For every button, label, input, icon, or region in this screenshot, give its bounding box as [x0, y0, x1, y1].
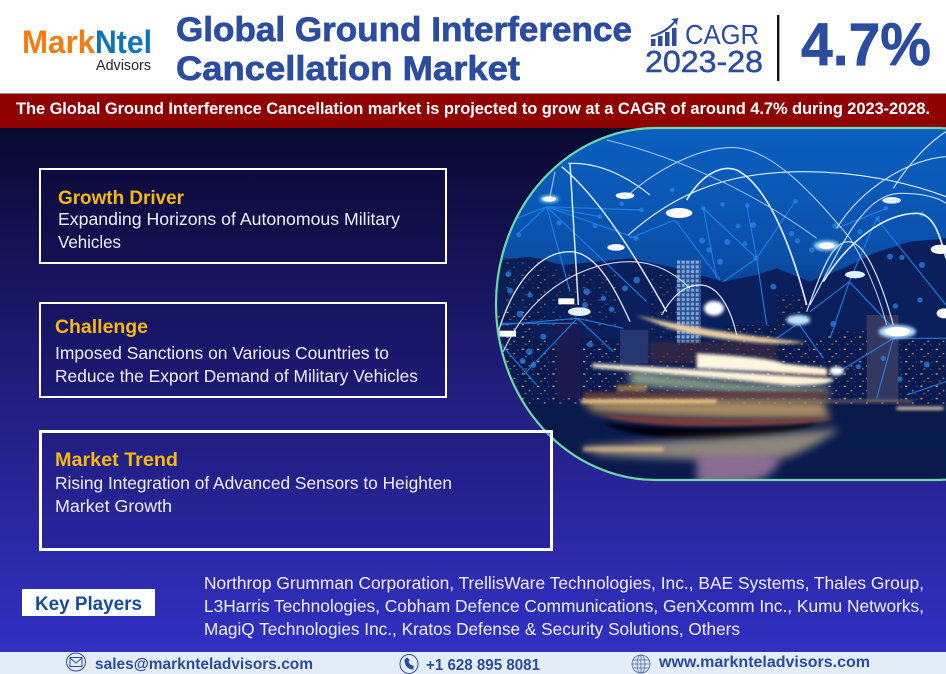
footer website: www.marknteladvisors.com [658, 654, 870, 671]
title [176, 11, 632, 88]
title: Global Ground Interference [176, 11, 632, 49]
icon: growth chart [651, 18, 678, 46]
panel: growth driver: Expanding Horizons of Autonomous Military [58, 209, 400, 229]
panel: challenge: Challenge [55, 317, 148, 338]
ship light trails [582, 315, 833, 439]
key players list: Northrop Grumman Corporation, TrellisWare Technologies, Inc., BAE Systems, Thales Group, [204, 573, 924, 593]
CAGR period label: 2023-28 [645, 44, 763, 79]
summary banner: The Global Ground Interference Cancellation market is projected to grow at a CAGR of around 4.7% during 2023-2028. [16, 100, 930, 118]
logo: MarkNtel Advisors: Mark [22, 24, 95, 60]
footer bar [0, 652, 946, 674]
icon: phone [400, 654, 418, 674]
blue bokeh dots [505, 188, 930, 382]
panel: growth driver: Growth Driver [58, 188, 185, 209]
glowing nodes [499, 192, 946, 375]
panel: market trend: Market Trend [55, 450, 178, 471]
key players list: L3Harris Technologies, Cobham Defence Communications, GenXcomm Inc., Kumu Networks, [204, 596, 924, 616]
panel: growth driver: Vehicles [58, 232, 121, 252]
panel: challenge: Reduce the Export Demand of Military Vehicles [55, 366, 418, 386]
panel: market trend: Market Growth [55, 496, 172, 516]
CAGR period label [645, 19, 763, 79]
divider [777, 15, 779, 81]
logo: MarkNtel Advisors: Ntel [95, 24, 152, 60]
key players list: MagiQ Technologies Inc., Kratos Defense & Security Solutions, Others [204, 619, 740, 639]
panel: growth driver [40, 169, 446, 263]
key players list [204, 573, 924, 639]
white arcs [498, 132, 946, 352]
logo: MarkNtel Advisors: Advisors [96, 57, 151, 74]
title: Cancellation Market [176, 50, 520, 88]
CAGR value: 4.7% [801, 11, 931, 78]
header background [0, 0, 946, 94]
panel: market trend: Rising Integration of Advanced Sensors to Heighten [55, 473, 452, 493]
icon: globe [632, 655, 650, 673]
panel: challenge [40, 303, 446, 397]
key players label: Key Players [35, 594, 142, 615]
CAGR period label: CAGR [685, 19, 759, 50]
panel: market trend [40, 432, 552, 550]
key players label [22, 589, 155, 616]
logo: MarkNtel Advisors [22, 24, 152, 74]
footer phone: +1 628 895 8081 [426, 657, 540, 674]
icon: email [66, 653, 86, 671]
panel: city network photo [490, 125, 946, 485]
water reflection [580, 428, 840, 485]
panel: challenge: Imposed Sanctions on Various Countries to [55, 343, 389, 363]
blue network lines [490, 202, 946, 398]
footer email: sales@marknteladvisors.com [95, 656, 313, 673]
summary banner [0, 93, 946, 128]
main background [0, 128, 946, 652]
